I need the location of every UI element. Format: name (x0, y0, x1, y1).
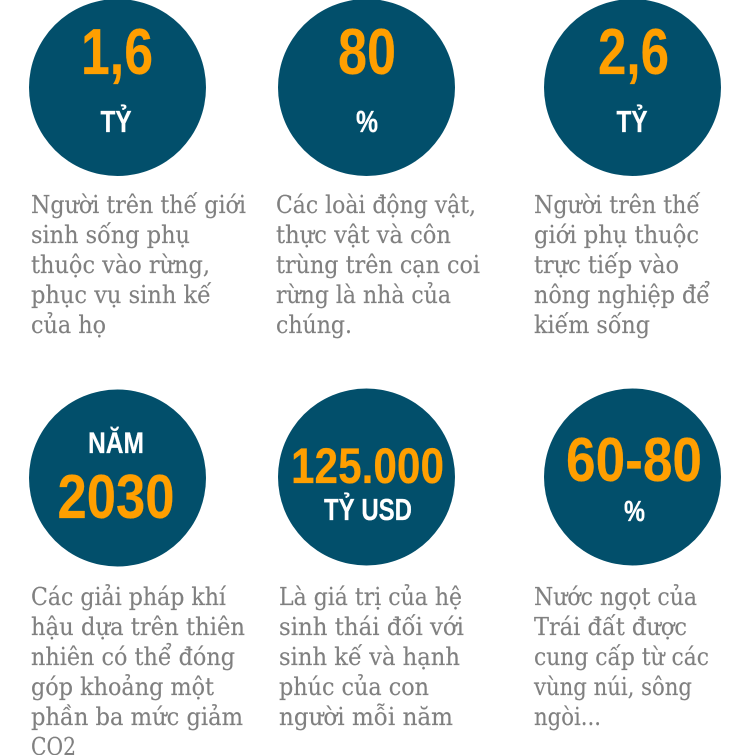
description 3: Người trên thế (534, 190, 701, 219)
description 1: của họ (31, 310, 106, 339)
description 3: trực tiếp vào (534, 250, 679, 279)
description 4: nhiên có thể đóng (31, 642, 235, 671)
description 1: thuộc vào rừng, (31, 250, 210, 279)
description 1: phục vụ sinh kế (31, 280, 212, 309)
description 1 (31, 190, 246, 339)
stat: 60-80 % (533, 388, 721, 731)
unit TỶ: TỶ (100, 104, 132, 139)
description 2: trùng trên cạn coi (276, 250, 480, 279)
unit percent: % (356, 104, 378, 139)
stat: 80 % (276, 0, 480, 339)
description 5: sinh thái đối với (279, 612, 464, 641)
description 3: nông nghiệp để (534, 280, 710, 309)
circle badge 1 (29, 0, 206, 176)
circle badge 2 (278, 0, 455, 176)
description 2: Các loài động vật, (276, 190, 476, 219)
description 4: hậu dựa trên thiên (31, 612, 245, 641)
description 1: sinh sống phụ (31, 220, 190, 249)
circle badge 4 (29, 390, 206, 566)
description 5: sinh kế và hạnh (279, 642, 460, 671)
unit percent: % (624, 496, 645, 528)
description 4: góp khoảng một (31, 672, 214, 701)
description 6: ngòi... (534, 702, 601, 731)
description 2: rừng là nhà của (276, 280, 451, 309)
description 3: giới phụ thuộc (534, 220, 699, 249)
description 5 (279, 582, 464, 731)
description 3: kiếm sống (534, 310, 650, 339)
circle badge 3 (544, 0, 721, 176)
description 2 (276, 190, 480, 339)
number 125.000: 125.000 (291, 438, 444, 494)
number 80: 80 (338, 15, 396, 88)
stat: nam 2030 (29, 390, 245, 755)
label NĂM: NĂM (88, 426, 144, 460)
description 4: phần ba mức giảm (31, 702, 243, 731)
description 3 (534, 190, 710, 339)
circle badge 5 (278, 388, 455, 566)
description 5: Là giá trị của hệ (279, 582, 462, 611)
number 60-80: 60-80 (566, 426, 702, 495)
description 6: Trái đất được (534, 612, 687, 641)
description 2: thực vật và côn (276, 220, 451, 249)
unit TỶ: TỶ (616, 104, 648, 139)
description 5: người mỗi năm (279, 702, 453, 731)
description 6: Nước ngọt của (534, 582, 697, 611)
stat: 125.000 ty usd (278, 388, 464, 731)
circle badge 6 (544, 388, 721, 566)
number 2030: 2030 (58, 463, 174, 532)
description 4: Các giải pháp khí (31, 582, 226, 611)
description 4 (31, 582, 245, 755)
description 1: Người trên thế giới (31, 190, 246, 219)
description 6: cung cấp từ các (534, 642, 709, 671)
description 5: phúc của con (279, 672, 429, 701)
unit TỶ USD: TỶ USD (324, 492, 412, 527)
number 1,6: 1,6 (81, 15, 153, 88)
stat: 2,6 ty (534, 0, 721, 339)
stat: 1,6 ty (29, 0, 246, 339)
description 6: vùng núi, sông (533, 672, 692, 701)
description 2: chúng. (276, 310, 352, 339)
description 6 (533, 582, 709, 731)
number 2,6: 2,6 (598, 15, 669, 88)
